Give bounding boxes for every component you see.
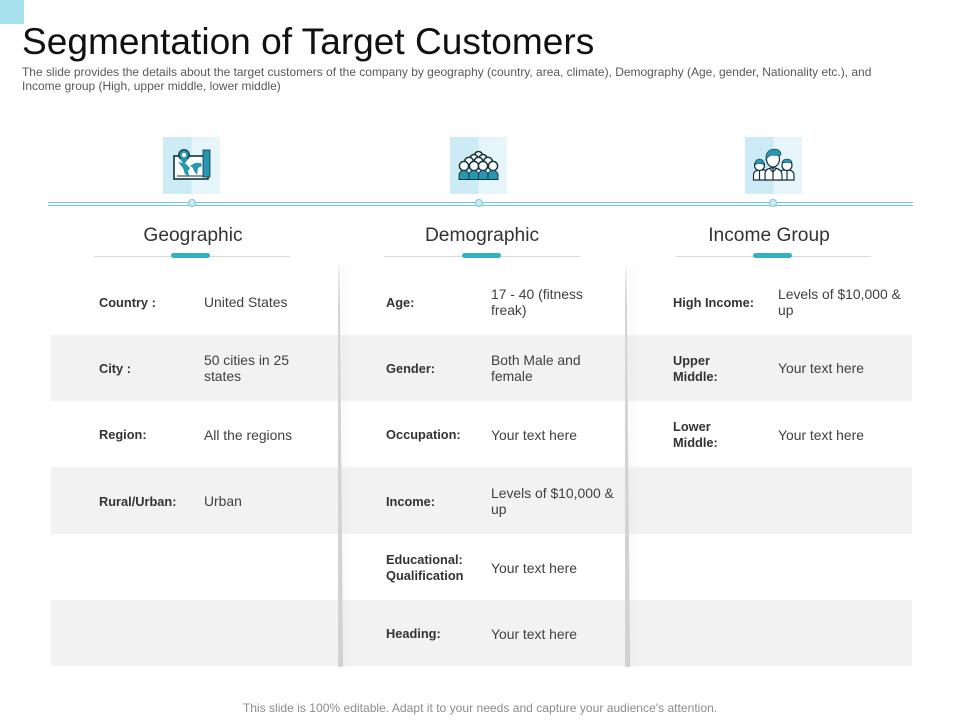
column: Geographic rows: United States (204, 294, 287, 310)
accent tab 2 (462, 253, 501, 258)
subtitle (22, 65, 871, 93)
accent tab 3 (753, 253, 792, 258)
column: Geographic rows: Country : (99, 295, 156, 310)
column: Demographic rows: Levels of $10,000 & (491, 485, 614, 501)
heading: Income Group: Income Group (708, 225, 830, 246)
column: Geographic rows: Urban (204, 493, 242, 509)
column: Demographic rows: Heading: (386, 626, 441, 641)
accent tab 1 (171, 253, 210, 258)
column: Income Group rows: Middle: (673, 435, 718, 450)
column: Demographic rows: Age: (386, 295, 414, 310)
heading: Geographic: Geographic (143, 225, 243, 246)
timeline node 3 (769, 199, 777, 207)
heading: Demographic: Demographic (425, 225, 539, 246)
column: Demographic rows: 17 - 40 (fitness (491, 286, 583, 302)
column: Demographic rows: Both Male and (491, 352, 581, 368)
column: Demographic rows: Your text here (491, 427, 577, 443)
column: Income Group rows: Lower (673, 419, 711, 434)
column separator 2 (625, 266, 630, 667)
column: Income Group rows: Middle: (673, 369, 718, 384)
column: Geographic rows: Region: (99, 427, 147, 442)
column separator 1 (338, 266, 343, 667)
column: Demographic rows: up (491, 501, 506, 517)
column: Income Group rows: Upper (673, 353, 710, 368)
timeline line (48, 202, 913, 206)
table bands (51, 335, 912, 401)
icon: map (163, 137, 220, 194)
column: Income Group rows: High Income: (673, 295, 754, 310)
column: Demographic rows: Gender: (386, 361, 435, 376)
subtitle: The slide provides the details about the target customers of the company by geography (country, area, climate), Demography (Age, gender, Nationality etc.), and (22, 65, 871, 79)
subtitle: Income group (High, upper middle, lower middle) (22, 79, 281, 93)
column: Income Group rows: Your text here (778, 427, 864, 443)
column: Demographic rows: Qualification (386, 568, 464, 583)
column: Geographic rows: Rural/Urban: (99, 494, 176, 509)
footer note: This slide is 100% editable. Adapt it to your needs and capture your audience's attention. (243, 701, 717, 715)
column: Geographic rows: 50 cities in 25 (204, 352, 289, 368)
corner accent (0, 0, 24, 24)
heading rule 3 (676, 256, 871, 257)
column: Geographic rows: City : (99, 361, 131, 376)
timeline node 2 (475, 199, 483, 207)
icon: people (745, 137, 802, 194)
column: Demographic rows: Occupation: (386, 427, 461, 442)
heading rule 1 (94, 256, 290, 257)
column: Demographic rows: Income: (386, 494, 435, 509)
column: Income Group rows: Levels of $10,000 & (778, 286, 901, 302)
title: Segmentation of Target Customers (22, 20, 594, 62)
column: Income Group rows: up (778, 302, 793, 318)
column: Geographic rows: All the regions (204, 427, 292, 443)
column: Demographic rows: Your text here (491, 560, 577, 576)
timeline node 1 (188, 199, 196, 207)
column: Demographic rows: female (491, 368, 533, 384)
column: Demographic rows: Your text here (491, 626, 577, 642)
column: Geographic rows: states (204, 368, 241, 384)
column: Income Group rows: Your text here (778, 360, 864, 376)
column: Demographic rows: freak) (491, 302, 527, 318)
heading rule 2 (384, 256, 580, 257)
column: Demographic rows: Educational: (386, 552, 463, 567)
icon: crowd (450, 137, 507, 194)
